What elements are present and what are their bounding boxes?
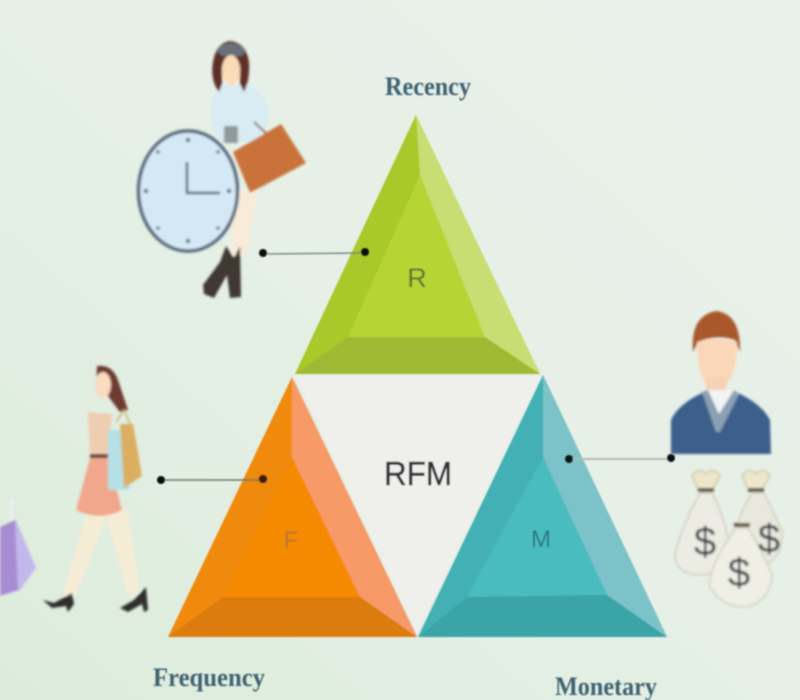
handles <box>116 410 130 424</box>
jacket <box>671 392 771 454</box>
bag handle <box>254 122 266 133</box>
illustration: man in suit <box>671 311 771 454</box>
orange bag <box>120 424 142 488</box>
connector: Recency <box>259 248 369 257</box>
money bag left <box>675 493 730 575</box>
hair <box>96 366 128 412</box>
bag <box>233 124 306 193</box>
skirt <box>76 458 122 516</box>
hair <box>693 311 740 352</box>
triangle: Recency R <box>295 115 540 374</box>
face <box>222 55 240 85</box>
illustration: money bags <box>675 470 782 607</box>
illustration: woman with shopping bags <box>43 366 148 612</box>
dollar signs: $ <box>694 520 716 564</box>
illustration: woman with clock and bag <box>138 41 306 298</box>
shirt <box>708 390 734 414</box>
letter: F: F <box>284 527 298 554</box>
boots <box>203 246 241 298</box>
triangle: Frequency F <box>168 377 417 637</box>
clock <box>138 131 238 251</box>
face <box>95 372 111 398</box>
letter: M: M <box>531 526 551 553</box>
center panel: RFM triangle <box>295 376 541 634</box>
money bag front <box>709 528 772 607</box>
lapels <box>702 390 739 432</box>
belt <box>90 454 108 458</box>
title: Recency: Recency <box>385 72 471 101</box>
torso <box>210 85 269 142</box>
money bag right <box>735 493 782 567</box>
face <box>697 339 737 384</box>
label: RFM: RFM <box>384 455 452 492</box>
triangle: Monetary M <box>418 375 667 637</box>
clock hands <box>187 162 220 193</box>
connector: Frequency <box>157 475 267 484</box>
hat <box>216 43 246 56</box>
phone <box>224 126 238 143</box>
illustration: purple bag <box>0 498 36 596</box>
dress top <box>88 412 112 456</box>
shoes <box>43 593 74 612</box>
blue bag <box>108 430 130 490</box>
illustration: money bags: $ <box>728 551 750 595</box>
hair <box>212 41 249 92</box>
illustration: money bags: $ <box>758 517 780 561</box>
letter: R: R <box>407 263 427 293</box>
bag ties <box>698 488 714 492</box>
legs <box>62 510 108 596</box>
bag tops <box>692 470 720 490</box>
neck <box>706 378 726 398</box>
title: Frequency: Frequency <box>153 663 265 692</box>
legs <box>232 190 258 255</box>
connector: Monetary <box>565 454 675 463</box>
